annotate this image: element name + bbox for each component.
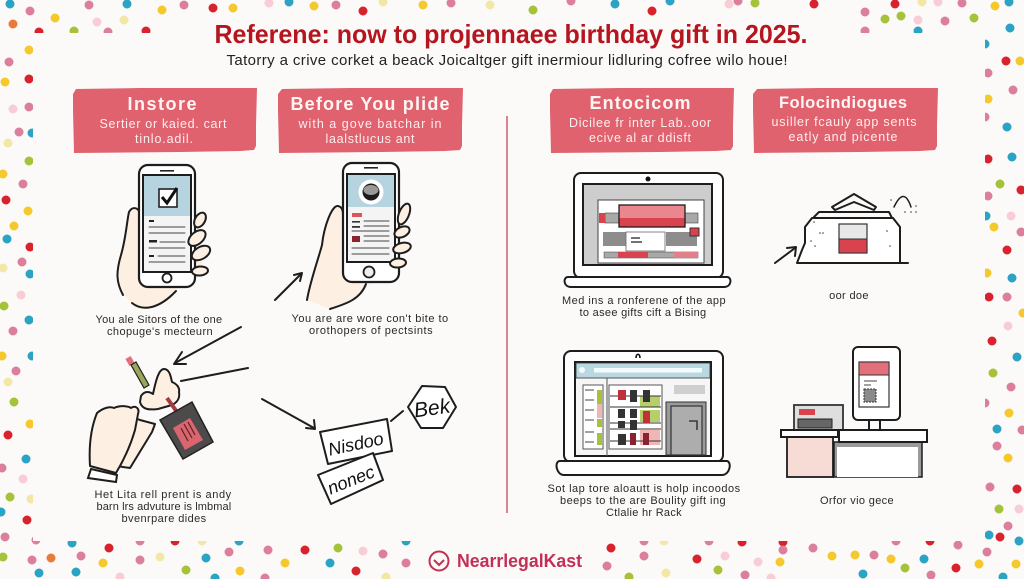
panel: Folocindiogues	[753, 88, 938, 153]
icon: handwritten tags: Nisdoo	[326, 428, 385, 460]
caption: hands	[94, 489, 232, 525]
panel: Entocicom: ecive al ar ddisft	[589, 131, 692, 145]
caption: phone one: chopuge's mecteurn	[107, 326, 213, 338]
caption: counter: Orfor vio gece	[820, 495, 894, 507]
caption: gift box: oor doe	[829, 290, 869, 302]
panel: Folocindiogues: Folocindiogues	[779, 94, 907, 112]
icon: laptop with shelves	[557, 351, 730, 475]
subtitle: Tatorry a crive corket a beack Joicaltger gift inermiour lidluring cofree wilo houe!	[226, 52, 788, 69]
caption: phone one: You ale Sitors of the one	[96, 314, 222, 326]
panel: Instore: Instore	[128, 94, 196, 114]
caption: laptop two: Sot lap tore aloautt is holp incoodos	[548, 483, 741, 495]
logo: NearrlegalKast: NearrlegalKast	[457, 550, 582, 571]
caption: hands: bvenrpare dides	[122, 513, 207, 525]
title: Referene: now to projennaee birthday gift in 2025.	[214, 19, 808, 49]
arrow: to gift box	[775, 247, 796, 263]
caption: phone two: You are are wore con't bite to	[292, 313, 448, 325]
caption: laptop one: Med ins a ronferene of the app	[562, 295, 726, 307]
caption: laptop one	[562, 295, 726, 319]
panel: Entocicom	[550, 88, 734, 153]
caption: laptop two: Ctlalie hr Rack	[606, 507, 682, 519]
arrow: plain line to hands	[181, 368, 248, 381]
caption: laptop one: to asee gifts cift a Bising	[580, 307, 706, 319]
panel: Folocindiogues: usiller fcauly app sents	[772, 115, 916, 129]
icon: checkout counter with kiosk	[781, 347, 927, 477]
panel: Folocindiogues: eatly and picente	[788, 130, 898, 144]
arrow: down to tags	[262, 399, 315, 429]
icon: handwritten tags: Bek	[413, 394, 453, 422]
caption: phone two: orothopers of pectsints	[309, 325, 433, 337]
panel: Instore: tinlo.adil.	[135, 132, 193, 146]
caption: phone one	[96, 314, 222, 338]
icon: handwritten tags	[318, 386, 456, 504]
panel: Before You plide: Before You plide	[290, 94, 450, 114]
caption: laptop two: beeps to the are Boulity gift ing	[560, 495, 726, 507]
caption: phone two	[292, 313, 448, 337]
divider	[506, 116, 508, 513]
panel: Instore: Sertier or kaied. cart	[100, 117, 227, 131]
caption: hands: barn lrs advuture is lmbmal	[96, 501, 232, 513]
icon: hands with pen and gift tag	[88, 356, 213, 482]
icon: laptop with storefront page	[565, 173, 730, 287]
arrow: down to hands	[174, 327, 241, 364]
panel: Instore	[73, 88, 257, 153]
icon: hand holding phone with camera circle	[307, 163, 413, 309]
caption: hands: Het Lita rell prent is andy	[94, 489, 232, 501]
panel: Entocicom: Entocicom	[590, 93, 690, 113]
panel: Before You plide	[278, 88, 463, 153]
arrow: up to phone	[275, 273, 302, 300]
icon: hand holding phone with checkbox	[117, 165, 213, 308]
icon: gift box with roof	[797, 194, 916, 263]
caption: laptop two	[548, 483, 741, 519]
panel: Before You plide: laalstlucus ant	[326, 132, 415, 146]
panel: Before You plide: with a gove batchar in	[298, 117, 442, 131]
icon: handwritten tags: nonec	[325, 462, 377, 498]
panel: Entocicom: Dicilee fr inter Lab..oor	[569, 116, 711, 130]
